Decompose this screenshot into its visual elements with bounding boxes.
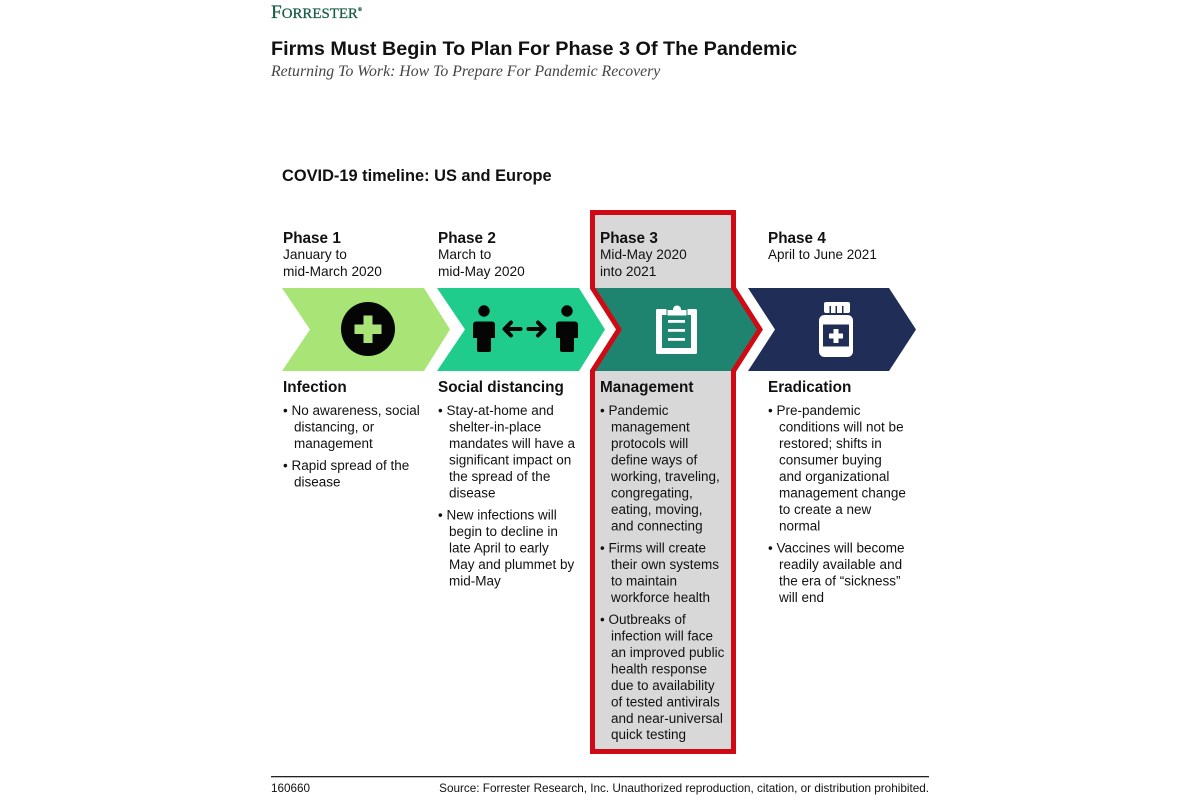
text block: social distancing [438, 379, 576, 588]
text block: eradication [768, 379, 906, 605]
text: phase 1 header: Phase 1 [283, 230, 341, 247]
text block: social distancing: mid-May [449, 574, 501, 588]
text block: management: • Outbreaks of [600, 612, 686, 627]
text block: management: to maintain [611, 574, 677, 588]
text block: management: management [611, 420, 690, 434]
text block: social distancing: mandates will have a [449, 436, 576, 451]
text block: social distancing: • Stay-at-home and [438, 403, 554, 418]
text: phase 1 header: mid-March 2020 [283, 264, 382, 279]
text: phase 1 header [283, 230, 382, 279]
text block: social distancing: begin to decline in [449, 524, 558, 539]
text: phase 4 header [768, 230, 877, 262]
text block: social distancing: May and plummet by [449, 557, 575, 572]
text block: management: Management [600, 379, 694, 396]
text block: eradication: • Vaccines will become [768, 540, 905, 556]
text: phase 2 header [438, 230, 525, 279]
text block: infection: Infection [283, 379, 347, 396]
panel: phase 3 highlight background [592, 212, 760, 752]
text block: social distancing: shelter-in-place [449, 420, 541, 434]
text: phase 3 header: Mid-May 2020 [600, 247, 687, 262]
icon: people distancing [473, 305, 578, 352]
text block: infection [283, 379, 420, 490]
text block: eradication: management change [779, 486, 906, 500]
text block: management: infection will face [611, 628, 713, 644]
text block: eradication: will end [778, 590, 824, 605]
footer: figure id: 160660 [271, 782, 311, 795]
text block: infection: disease [294, 474, 341, 490]
text block: infection: • Rapid spread of the [283, 458, 409, 473]
text block: eradication: • Pre-pandemic [768, 403, 861, 418]
text block: infection: management [294, 436, 373, 451]
text block: management: their own systems [611, 557, 719, 572]
icon: medicine bottle [819, 302, 853, 357]
text block: management: • Pandemic [600, 403, 669, 418]
text block: eradication: Eradication [768, 379, 851, 396]
text block: management: due to availability [611, 678, 715, 693]
arrow: phase 4 [748, 288, 916, 371]
text: phase 3 header: Phase 3 [600, 230, 658, 247]
footer: source: Source: Forrester Research, Inc. Unauthorized reproduction, citation, or distribution prohibited. [439, 782, 929, 795]
text: phase 4 header: April to June 2021 [768, 247, 877, 262]
text block: social distancing: Social distancing [438, 379, 564, 396]
text: phase 2 header: March to [438, 247, 492, 262]
text block: social distancing: late April to early [449, 540, 549, 556]
text block: eradication: the era of “sickness” [779, 574, 901, 588]
text block: social distancing: • New infections will [438, 508, 557, 522]
text block: infection: distancing, or [294, 420, 375, 434]
text block: management: protocols will [611, 436, 688, 451]
icon: clipboard [656, 305, 697, 354]
text: phase 3 header [600, 230, 687, 279]
logo: Forrester: ® [358, 6, 362, 13]
arrow: phase 1 [282, 288, 450, 371]
text: phase 1 header: January to [283, 247, 347, 262]
text block: management: an improved public [611, 645, 725, 660]
text block: eradication: and organizational [779, 469, 889, 484]
text block: management: and connecting [611, 518, 703, 534]
subtitle: Returning To Work: How To Prepare For Pandemic Recovery [270, 63, 661, 80]
text block: eradication: restored; shifts in [779, 436, 882, 451]
text block: management: of tested antivirals [611, 694, 720, 710]
text block: management [600, 379, 725, 742]
text block: management: eating, moving, [611, 502, 703, 517]
text block: infection: • No awareness, social [283, 403, 420, 418]
text block: management: quick testing [611, 727, 686, 742]
text block: eradication: normal [779, 518, 820, 534]
text block: management: workforce health [610, 590, 710, 605]
title: Firms Must Begin To Plan For Phase 3 Of The Pandemic [271, 38, 797, 60]
text block: eradication: readily available and [779, 557, 902, 572]
chart heading: COVID-19 timeline: US and Europe [282, 167, 552, 185]
text block: eradication: conditions will not be [779, 420, 904, 434]
text block: management: • Firms will create [600, 540, 706, 556]
text block: social distancing: disease [449, 486, 496, 500]
text block: management: health response [611, 662, 707, 676]
text: phase 4 header: Phase 4 [768, 230, 826, 247]
text block: management: working, traveling, [610, 469, 720, 484]
text block: management: congregating, [611, 486, 693, 500]
text block: eradication: consumer buying [779, 452, 882, 468]
text block: eradication: to create a new [779, 502, 872, 517]
logo: Forrester: FORRESTER [271, 2, 358, 23]
text: phase 2 header: mid-May 2020 [438, 264, 525, 279]
text block: management: and near-universal [611, 711, 723, 726]
text: phase 3 header: into 2021 [600, 264, 656, 279]
text block: management: define ways of [611, 452, 698, 468]
text block: social distancing: the spread of the [449, 469, 550, 484]
footer rule [271, 776, 929, 777]
text block: social distancing: significant impact on [449, 452, 571, 468]
text: phase 2 header: Phase 2 [438, 230, 496, 247]
arrow: phase 2 [437, 288, 605, 371]
icon: medical plus [341, 302, 395, 356]
